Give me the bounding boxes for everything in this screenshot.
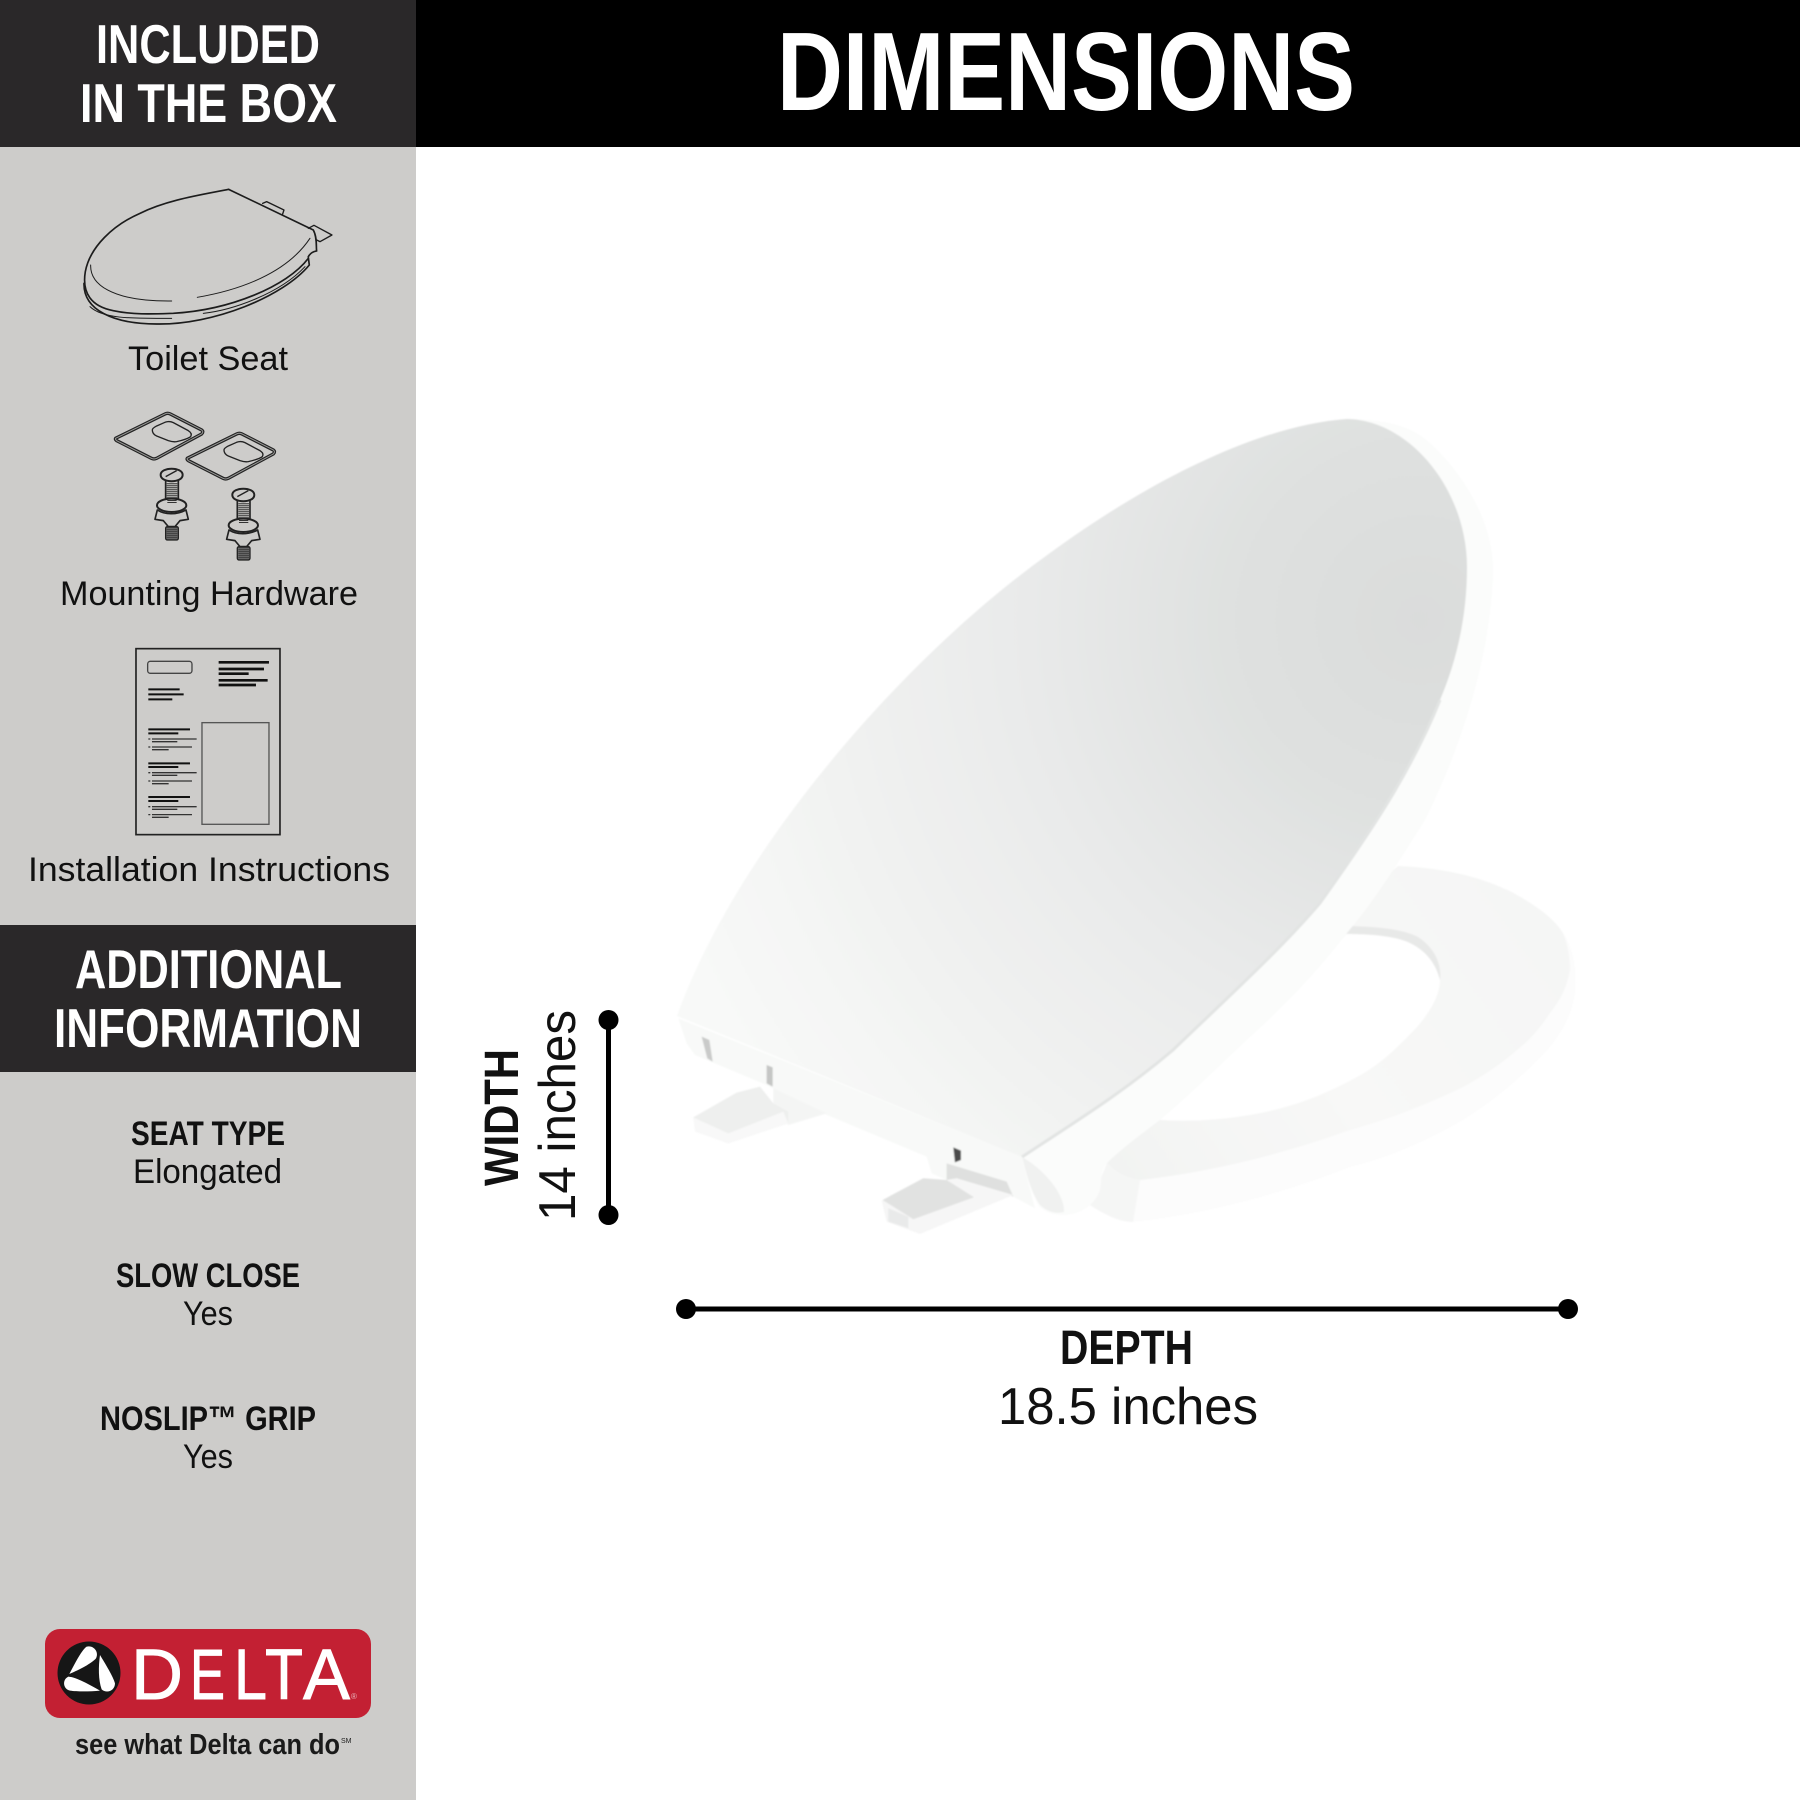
spec: seat type bbox=[131, 1115, 285, 1191]
width label: WIDTH bbox=[476, 1049, 529, 1186]
heading: included in the box bbox=[0, 0, 416, 147]
spec: seat type: SEAT TYPE bbox=[131, 1115, 285, 1153]
label: mounting hardware: Mounting Hardware bbox=[60, 575, 358, 613]
lid inner edge shadow bbox=[1022, 700, 1440, 1157]
bolt right bbox=[227, 489, 260, 560]
logo wordmark: E bbox=[190, 1636, 225, 1715]
heading: included in the box: INCLUDED bbox=[96, 13, 320, 75]
bolt left bbox=[155, 469, 188, 540]
icon: toilet seat line drawing bbox=[84, 189, 332, 324]
logo wordmark: A bbox=[303, 1636, 351, 1715]
label: installation instructions: Installation Instructions bbox=[28, 851, 390, 889]
lid face bbox=[677, 419, 1467, 1157]
logo wordmark: T bbox=[265, 1636, 303, 1715]
plate right bbox=[187, 433, 274, 479]
logo mark: three drops bbox=[64, 1646, 115, 1691]
logo tagline: see what Delta can do bbox=[75, 1729, 340, 1761]
spec: noslip grip: Yes bbox=[183, 1438, 233, 1476]
logo wordmark: L bbox=[234, 1636, 267, 1715]
dimension: depth bbox=[676, 1299, 1578, 1436]
dimension: width bbox=[476, 1010, 618, 1225]
width marker bbox=[598, 1010, 618, 1225]
spec: seat type: Elongated bbox=[133, 1153, 282, 1191]
logo wordmark: D bbox=[131, 1636, 183, 1715]
heading: additional information: INFORMATION bbox=[54, 997, 362, 1059]
spec: slow close bbox=[116, 1257, 300, 1333]
heading: additional information: ADDITIONAL bbox=[75, 938, 342, 1000]
panel: sidebar background bbox=[0, 0, 416, 1800]
depth marker bbox=[676, 1299, 1578, 1319]
logo tagline: SM bbox=[341, 1738, 352, 1745]
logo: delta bbox=[45, 1629, 371, 1761]
heading: included in the box: IN THE BOX bbox=[80, 72, 337, 134]
depth value: 18.5 inches bbox=[998, 1378, 1258, 1436]
width value: 14 inches bbox=[529, 1010, 587, 1221]
title: dimensions bbox=[416, 0, 1800, 147]
icon: instructions sheet bbox=[136, 649, 280, 835]
spec: noslip grip: NOSLIP™ GRIP bbox=[100, 1400, 316, 1438]
spec: slow close: Yes bbox=[183, 1295, 233, 1333]
product: toilet seat photo bbox=[677, 419, 1576, 1234]
hinge and underside bbox=[678, 1018, 1035, 1234]
icon: mounting hardware bbox=[115, 413, 274, 560]
label: toilet seat: Toilet Seat bbox=[128, 340, 289, 378]
title: dimensions: DIMENSIONS bbox=[777, 10, 1355, 134]
lid rim bbox=[1022, 419, 1493, 1215]
logo wordmark bbox=[131, 1636, 351, 1715]
lid knuckle facet bbox=[1022, 1157, 1064, 1213]
depth label: DEPTH bbox=[1060, 1322, 1193, 1375]
plate left bbox=[115, 413, 203, 459]
spec: noslip grip bbox=[100, 1400, 316, 1476]
seat ring bbox=[1090, 866, 1576, 1222]
heading: additional information bbox=[0, 925, 416, 1072]
spec: slow close: SLOW CLOSE bbox=[116, 1257, 300, 1295]
registered mark: ® bbox=[351, 1692, 357, 1701]
